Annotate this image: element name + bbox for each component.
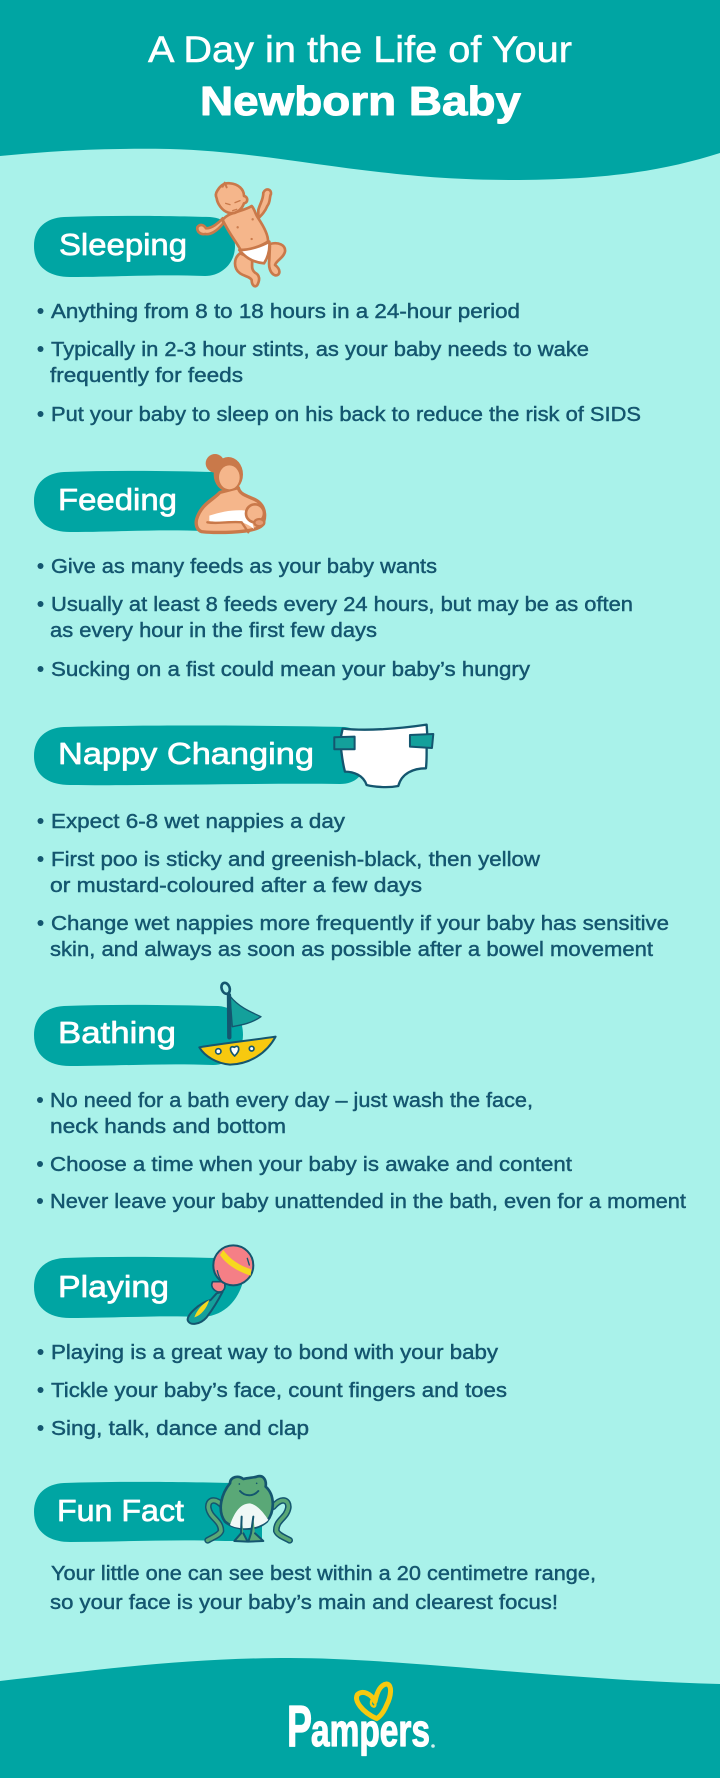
icon: heart [357,1684,391,1719]
bullet list: bathing [37,1089,686,1213]
bullet list: nappy changing [38,810,669,961]
heading: playing: Playing [58,1269,169,1304]
heading: feeding: Feeding [58,482,177,517]
bullet list: nappy changing: Change wet nappies more frequently if your baby has sensitive [51,912,669,935]
bullet list: feeding: Sucking on a fist could mean your baby’s hungry [51,658,531,681]
bullet list: nappy changing: or mustard-coloured after a few days [50,874,422,897]
heading: bathing: Bathing [58,1015,176,1050]
wordmark: P [287,1694,312,1759]
icon: toy boat [199,982,276,1065]
title: Newborn Baby [200,78,521,124]
panel: playing [34,1245,507,1440]
bullet list: feeding: Usually at least 8 feeds every 24 hours, but may be as often [51,593,633,616]
text block: fun fact [50,1562,596,1614]
panel: bathing [34,982,686,1213]
icon: mother and baby [196,454,265,532]
heading: fun fact [34,1482,262,1542]
title: A Day in the Life of Your [148,29,572,70]
heading: fun fact: Fun Fact [57,1493,184,1528]
bullet list: bathing: neck hands and bottom [50,1115,286,1138]
heading: sleeping: Sleeping [59,227,187,262]
bullet list: sleeping: Put your baby to sleep on his back to reduce the risk of SIDS [51,403,641,426]
text block: fun fact: so your face is your baby’s main and clearest focus! [50,1591,558,1614]
bullet list: bathing: No need for a bath every day – just wash the face, [50,1089,533,1112]
heading: nappy changing [34,726,366,785]
bullet list: sleeping: Typically in 2-3 hour stints, as your baby needs to wake [51,338,589,361]
panel: sleeping [34,183,641,426]
heading: feeding [34,471,232,532]
title [148,29,572,124]
icon: rattle [188,1245,253,1324]
header band [0,0,720,180]
registered mark dot [431,1744,435,1748]
bullet list: feeding: Give as many feeds as your baby wants [51,555,437,578]
bullet list: bathing: Never leave your baby unattended in the bath, even for a moment [50,1190,686,1213]
icon: baby [197,183,285,286]
heading: nappy changing: Nappy Changing [58,736,314,771]
bullet list: playing: Playing is a great way to bond with your baby [51,1341,499,1364]
wordmark: ampers [311,1705,430,1756]
bullet list: nappy changing: Expect 6-8 wet nappies a day [51,810,346,833]
heading: playing [34,1257,242,1318]
bullet list: sleeping [38,300,641,426]
bullet list: sleeping: frequently for feeds [50,364,243,387]
bullet list: playing: Sing, talk, dance and clap [51,1417,309,1440]
logo: Pampers [287,1684,435,1759]
text block: fun fact: Your little one can see best within a 20 centimetre range, [51,1562,596,1585]
bullet list: feeding: as every hour in the first few days [50,619,377,642]
bullet list: feeding [38,555,633,681]
bullet list: nappy changing: skin, and always as soon as possible after a bowel movement [50,938,653,961]
bullet list: sleeping: Anything from 8 to 18 hours in a 24-hour period [51,300,520,323]
icon: frog [208,1476,290,1542]
footer band [0,1658,720,1778]
panel: feeding [34,454,633,681]
bullet list: nappy changing: First poo is sticky and greenish-black, then yellow [51,848,540,871]
panel: nappy changing [34,725,669,961]
bullet list: playing: Tickle your baby’s face, count fingers and toes [51,1379,507,1402]
bullet list: playing [38,1341,507,1440]
heading: sleeping [34,216,235,277]
icon: nappy [334,725,433,787]
panel: fun fact [34,1476,596,1614]
heading: bathing [34,1005,243,1066]
bullet list: bathing: Choose a time when your baby is awake and content [50,1153,572,1176]
